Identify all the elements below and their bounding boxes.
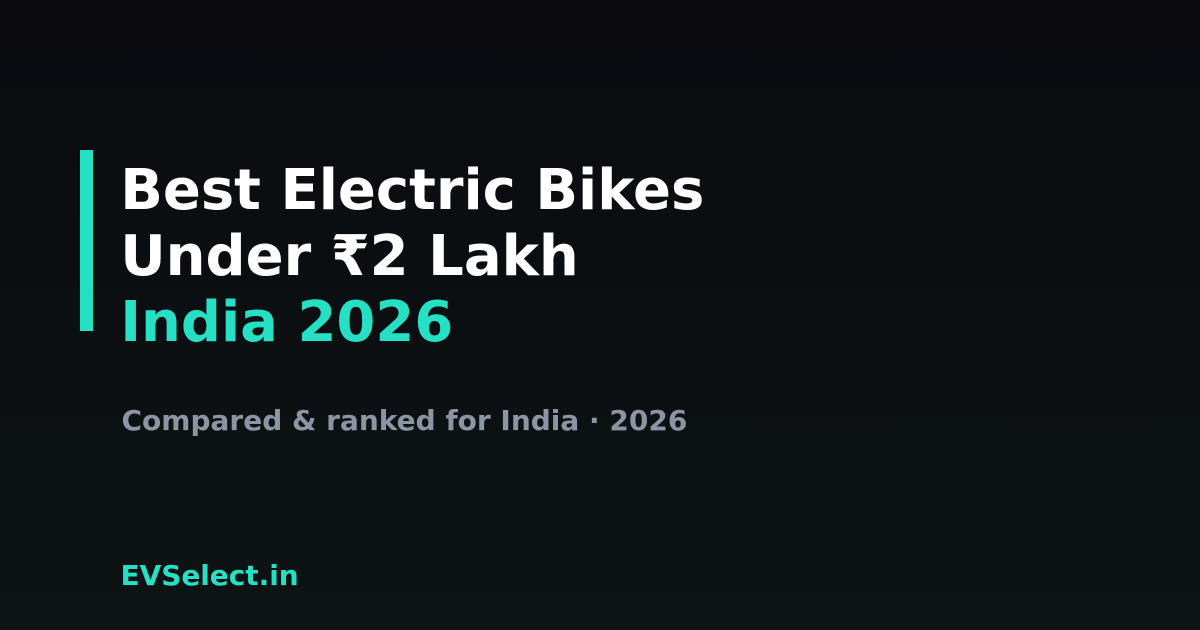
title: Best Electric Bikes — [120, 158, 704, 223]
brand: EVSelect.in — [120, 559, 299, 592]
title — [120, 158, 704, 355]
subtitle: Compared & ranked for India · 2026 — [122, 404, 687, 437]
title: Under ₹2 Lakh — [120, 224, 579, 289]
title: India 2026 — [120, 290, 453, 355]
accent bar — [80, 150, 93, 331]
